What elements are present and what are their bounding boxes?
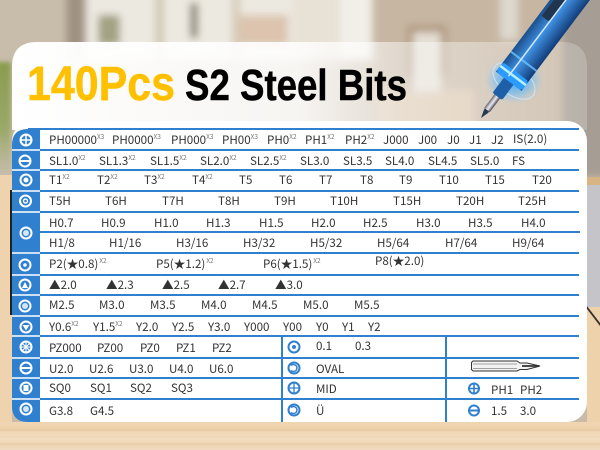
row: triangle: ▲3.0 [275, 277, 303, 293]
row: hex metric: H1.3 [206, 215, 231, 231]
row: hex metric: H0.9 [101, 215, 126, 231]
row: U slot: U4.0 [169, 361, 193, 377]
third column labels: PH2 [520, 382, 542, 398]
icon: pozidriv [20, 342, 32, 352]
icon: torx hole [20, 196, 31, 206]
row: hex metric: H1.0 [154, 215, 179, 231]
icon: torx [20, 174, 32, 186]
row: triangle [49, 277, 303, 293]
row: hex imperial: H3/16 [176, 235, 208, 251]
row: U slot [49, 361, 233, 377]
second column labels: 0.1 [316, 338, 332, 354]
second column labels: Ü [316, 403, 324, 419]
row: tri-wing: Y2.0 [135, 319, 158, 335]
row: slotted: X2 [229, 152, 237, 162]
row: pozidriv: PZ2 [212, 340, 232, 356]
row: phillips: PH0000 [112, 132, 154, 148]
row: phillips: X3 [206, 131, 214, 141]
row: slotted: X2 [179, 152, 187, 162]
icon: gamepad G [20, 404, 32, 414]
row: slotted: SL4.5 [428, 153, 457, 169]
row: phillips: PH00 [222, 132, 251, 148]
row: square: SQ0 [49, 380, 71, 396]
row: metric hex M: M3.0 [99, 297, 125, 313]
row: phillips [49, 131, 547, 148]
row: slotted: FS [512, 153, 525, 169]
row: torx: T8 [360, 172, 373, 188]
row: hex imperial: H1/16 [109, 235, 141, 251]
icons: second column [288, 342, 300, 416]
row: slotted: SL1.3 [99, 153, 128, 169]
row: torx hole: T6H [105, 193, 127, 209]
row: torx: T15 [485, 172, 505, 188]
icon: phillips [20, 134, 32, 146]
second column labels: MID [316, 381, 337, 397]
row: tri-wing [48, 318, 381, 335]
row: torx hole: T8H [218, 193, 240, 209]
row: U slot: U2.6 [89, 361, 113, 377]
icon: mid [288, 382, 300, 394]
row: pozidriv: PZ000 [49, 340, 82, 356]
row: slotted: SL1.0 [49, 153, 78, 169]
row: torx hole: T5H [49, 193, 71, 209]
row: torx: T5 [239, 172, 252, 188]
icon: U shape [288, 404, 300, 416]
row: slotted: SL1.5 [150, 153, 179, 169]
icons: drive types [20, 134, 32, 414]
row: torx: T10 [439, 172, 459, 188]
row: tri-wing: Y000 [243, 319, 269, 335]
row: hex imperial [49, 235, 545, 251]
row: hex metric: H2.5 [363, 215, 388, 231]
row: slotted: X2 [279, 152, 287, 162]
row: metric hex M: M3.5 [150, 297, 176, 313]
bit-type icon column [12, 129, 40, 422]
row: hex imperial: H5/32 [310, 235, 342, 251]
row: phillips: X3 [97, 131, 105, 141]
row: triangle: ▲2.7 [218, 277, 246, 293]
row: torx: T6 [279, 172, 292, 188]
row: torx hole: T10H [330, 193, 358, 209]
row: phillips: J000 [383, 132, 409, 148]
row: torx: X2 [205, 171, 213, 181]
row: tri-wing: Y3.0 [207, 319, 230, 335]
row: phillips: X2 [367, 131, 375, 141]
row: phillips: X2 [289, 131, 297, 141]
row: phillips: J00 [418, 132, 437, 148]
row: hex metric: H3.0 [416, 215, 441, 231]
icon: double-ended bit illustration [472, 361, 540, 371]
row: hex metric: H3.5 [468, 215, 493, 231]
row: phillips: J1 [469, 132, 482, 148]
row: phillips: PH2 [345, 132, 367, 148]
row: slotted: SL3.5 [343, 153, 372, 169]
row: pentalobe: P8(★2.0) [375, 253, 424, 269]
row: phillips: PH00000 [49, 132, 97, 148]
row: phillips: J0 [447, 132, 460, 148]
row: U slot: U3.0 [129, 361, 153, 377]
row: metric hex M [49, 297, 380, 313]
row: U slot: U2.0 [49, 361, 73, 377]
row: slotted: SL2.5 [250, 153, 279, 169]
second column labels: OVAL [316, 361, 344, 377]
row: tri-wing: Y2.5 [171, 319, 194, 335]
white table panel [12, 121, 587, 422]
icon: electric screwdriver with glowing collar [468, 0, 600, 128]
row: pozidriv: PZ00 [97, 340, 123, 356]
translucent title panel [12, 42, 587, 130]
row: pentalobe: X2 [99, 255, 107, 265]
row: torx hole: T7H [162, 193, 184, 209]
row: pentalobe: P5(★1.2) [156, 256, 205, 272]
row: metric hex M: M5.5 [354, 297, 380, 313]
row: tri-wing: Y1 [341, 319, 355, 335]
icon: hex [20, 228, 32, 238]
icon column separators [12, 150, 40, 399]
title [27, 58, 407, 111]
second column labels: 0.3 [355, 338, 371, 354]
row: phillips: PH0 [267, 132, 289, 148]
title: S2 Steel Bits [185, 61, 407, 110]
row: metric hex M: M4.0 [201, 297, 227, 313]
row: pentalobe [49, 253, 424, 272]
row: gamepad [49, 403, 114, 419]
row: triangle: ▲2.3 [106, 277, 134, 293]
row: phillips: X3 [251, 131, 258, 141]
row: tri-wing: Y00 [282, 319, 302, 335]
row: slotted: X2 [78, 152, 86, 162]
icon: metric hex [20, 300, 30, 312]
row: hex metric: H0.7 [49, 215, 74, 231]
row: phillips: PH000 [171, 132, 206, 148]
row: slotted: SL3.0 [300, 153, 329, 169]
third column labels: 1.5 [491, 403, 507, 419]
icon: square [20, 382, 32, 394]
icon: triangle [20, 280, 30, 290]
bit size table text [48, 131, 552, 419]
row: phillips: PH1 [305, 132, 327, 148]
row: phillips: X2 [327, 131, 335, 141]
row: torx: X2 [110, 171, 118, 181]
row: torx hole: T9H [274, 193, 296, 209]
row: hex imperial: H7/64 [445, 235, 478, 251]
row: torx: T20 [532, 172, 552, 188]
row: torx: T3 [144, 172, 157, 188]
row: pentalobe: X2 [206, 255, 214, 265]
row: gamepad: G4.5 [90, 403, 114, 419]
row: tri-wing: Y2 [367, 319, 381, 335]
row: metric hex M: M5.0 [303, 297, 329, 313]
row: slotted [49, 152, 525, 169]
row: hex metric: H4.0 [521, 215, 546, 231]
row: torx hole: T15H [393, 193, 421, 209]
row: pentalobe: P6(★1.5) [263, 256, 312, 272]
row: slotted: SL5.0 [470, 153, 499, 169]
row: slotted: SL4.0 [385, 153, 414, 169]
row: hex metric: H2.0 [311, 215, 336, 231]
row: gamepad: G3.8 [49, 403, 73, 419]
row: pozidriv: PZ1 [176, 340, 196, 356]
row: slotted: X2 [128, 152, 136, 162]
row: pentalobe: P2(★0.8) [49, 256, 98, 272]
row: hex imperial: H9/64 [512, 235, 545, 251]
row: tri-wing: X2 [115, 318, 123, 328]
row: torx: T9 [399, 172, 412, 188]
third column labels: 3.0 [520, 403, 536, 419]
icon: oval [288, 362, 300, 374]
row: hex metric: H1.5 [259, 215, 284, 231]
row: torx: T7 [319, 172, 332, 188]
row: square: SQ2 [130, 380, 152, 396]
row: torx: T2 [97, 172, 110, 188]
icon: tri-wing Y [20, 322, 32, 332]
row: tri-wing: Y1.5 [93, 319, 115, 335]
icon: U slot [20, 362, 32, 374]
row: metric hex M: M2.5 [49, 297, 75, 313]
row: hex imperial: H1/8 [49, 235, 75, 251]
icon: blue slotted legend [468, 406, 480, 416]
row: torx: T1 [49, 172, 62, 188]
icon: tri-point small [288, 342, 300, 352]
row: torx: X2 [62, 171, 70, 181]
row: tri-wing: Y0.6 [49, 319, 71, 335]
row: triangle: ▲2.0 [49, 277, 77, 293]
row: tri-wing: X2 [71, 318, 79, 328]
row: torx: T4 [192, 172, 205, 188]
row: phillips: J2 [491, 132, 504, 148]
second column labels [316, 338, 371, 419]
row: torx hole [49, 193, 546, 209]
row: phillips: IS(2.0) [513, 131, 547, 147]
table grid lines [28, 129, 580, 422]
row: pozidriv [49, 340, 232, 356]
third column labels [491, 382, 542, 419]
icon: slotted [20, 156, 30, 166]
row: U slot: U6.0 [209, 361, 233, 377]
icon: blue phillips legend [468, 382, 480, 394]
third column labels: PH1 [491, 382, 513, 398]
row: pozidriv: PZ0 [140, 340, 160, 356]
row: square [49, 380, 193, 396]
row: square: SQ1 [90, 380, 112, 396]
row: hex imperial: H3/32 [243, 235, 275, 251]
row: torx [49, 171, 552, 188]
title: 140Pcs [27, 58, 175, 111]
row: torx: X2 [157, 171, 165, 181]
icon: pentalobe [20, 260, 30, 270]
row: torx hole: T25H [518, 193, 546, 209]
row: hex imperial: H5/64 [377, 235, 410, 251]
row: square: SQ3 [171, 380, 193, 396]
row: slotted: SL2.0 [200, 153, 229, 169]
row: metric hex M: M4.5 [252, 297, 278, 313]
row: tri-wing: Y0 [315, 319, 329, 335]
row: pentalobe: X2 [313, 255, 321, 265]
row: hex metric [49, 215, 546, 231]
row: triangle: ▲2.5 [162, 277, 190, 293]
row: torx hole: T20H [456, 193, 484, 209]
row: phillips: X3 [154, 131, 161, 141]
